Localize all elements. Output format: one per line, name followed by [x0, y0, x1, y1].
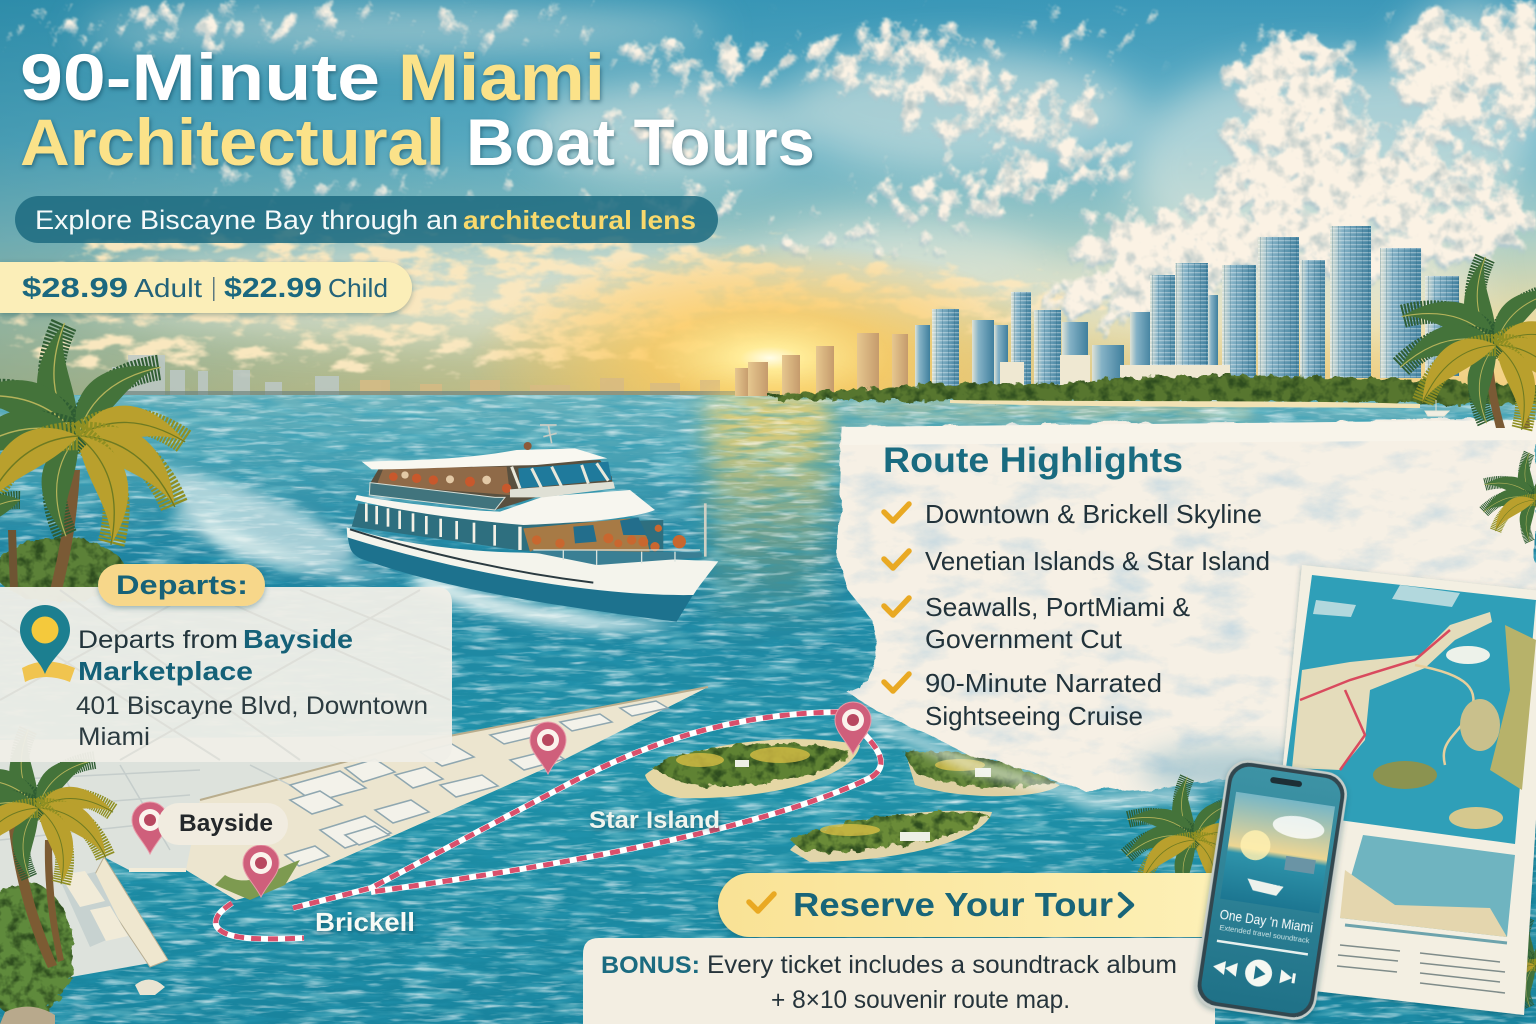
route path — [216, 712, 881, 939]
panel: departure info — [0, 587, 452, 762]
left palm with bush — [0, 323, 197, 602]
title: Architectural — [20, 105, 445, 179]
departs tag: Departs: — [116, 570, 248, 600]
souvenir route map poster — [1262, 565, 1536, 1015]
map label: Brickell: Brickell — [315, 907, 415, 937]
panel: departure info: Bayside — [243, 624, 353, 654]
distant skyline left — [90, 355, 780, 396]
icon: chevron — [1120, 894, 1132, 916]
price pill: Adult — [134, 273, 203, 303]
sky background — [0, 0, 1536, 400]
album art — [1220, 792, 1335, 913]
map pins — [132, 702, 871, 897]
panel: departure info: Departs from — [78, 626, 238, 654]
boat wake — [130, 465, 680, 630]
islands — [645, 739, 1060, 862]
tour boat — [347, 425, 718, 622]
panel: route highlights background — [838, 420, 1536, 803]
upper deck — [369, 460, 613, 510]
panel: departure info: 401 Biscayne Blvd, Downtown — [76, 692, 428, 720]
item: skyline: Downtown & Brickell Skyline — [925, 499, 1262, 529]
phone with album player — [1193, 758, 1349, 1022]
right palm — [1397, 257, 1536, 430]
clouds — [0, 0, 1536, 372]
price pill: $28.99 — [22, 272, 128, 303]
panel: departure info: Miami — [78, 723, 150, 751]
city map land and port — [0, 687, 708, 1024]
heading: Route Highlights — [883, 441, 1183, 480]
downtown skyline right — [735, 226, 1536, 416]
water — [0, 395, 1536, 1024]
item: cruise: Sightseeing Cruise — [925, 701, 1143, 731]
item: seawalls: Seawalls, PortMiami & — [925, 592, 1190, 622]
subtitle pill — [15, 196, 718, 243]
icon: location pin — [20, 605, 75, 682]
title: 90-Minute — [20, 40, 380, 114]
phone with album player: One Day 'n Miami — [1219, 906, 1314, 936]
subtitle pill: Explore Biscayne Bay through an — [35, 205, 458, 235]
price pill — [0, 262, 412, 313]
bushes — [0, 882, 73, 1018]
item: cruise — [884, 668, 1162, 731]
lower-left palm — [0, 729, 121, 968]
title: Boat Tours — [466, 105, 815, 179]
bonus panel: + 8×10 souvenir route map. — [771, 986, 1070, 1014]
map label: Bayside: Bayside — [179, 810, 273, 837]
departs tag — [98, 564, 265, 606]
bonus panel — [583, 938, 1215, 1024]
hull — [347, 535, 695, 622]
sun glow — [470, 243, 1070, 473]
icon: check — [749, 894, 774, 911]
cabin deck — [352, 503, 663, 552]
player controls — [1211, 953, 1297, 992]
bonus panel: Every ticket includes a soundtrack album — [707, 951, 1177, 979]
map label: Star Island: Star Island — [589, 807, 720, 834]
panel: departure info: Marketplace — [78, 656, 253, 686]
route highlights — [883, 441, 1270, 731]
phone with album player: Extended travel soundtrack — [1219, 923, 1310, 945]
bonus panel: BONUS: — [601, 952, 700, 979]
item: cruise: 90-Minute Narrated — [925, 668, 1162, 698]
subtitle pill: architectural lens — [463, 205, 696, 235]
item: islands: Venetian Islands & Star Island — [925, 546, 1270, 576]
price pill: Child — [328, 273, 388, 303]
title: Miami — [398, 40, 605, 114]
item: seawalls — [884, 592, 1190, 654]
palm trees — [0, 257, 1536, 1011]
map label: Bayside — [158, 803, 288, 845]
call to action button: Reserve Your Tour — [793, 886, 1113, 923]
title — [20, 40, 815, 179]
item: seawalls: Government Cut — [925, 624, 1123, 654]
call to action button — [718, 873, 1215, 937]
price pill: $22.99 — [224, 272, 322, 303]
